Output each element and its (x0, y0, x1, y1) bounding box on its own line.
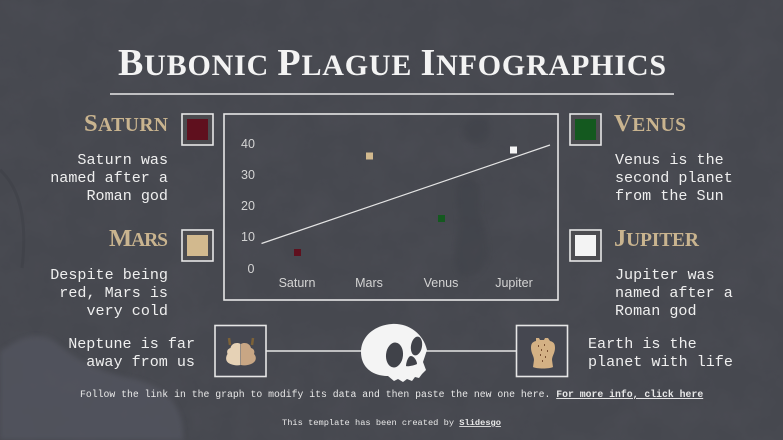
text: Mars description: very cold (86, 302, 168, 320)
panel: Jupiter (570, 225, 733, 320)
text: Saturn description: Roman god (86, 187, 168, 205)
y axis labels: 40 (241, 137, 255, 151)
x axis labels (279, 276, 533, 290)
data points (294, 146, 517, 256)
footer note: Follow the link in the graph to modify its data and then paste the new one here. For more info, click here (80, 389, 703, 400)
y axis labels: 0 (248, 262, 255, 276)
text: Earth: Earth is the (588, 335, 697, 353)
icon: Jupiter swatch (570, 230, 601, 261)
trend line (262, 145, 550, 244)
text: Mars description: Despite being (50, 266, 168, 284)
text: Neptune: away from us (86, 353, 195, 371)
text: Mars description: red, Mars is (59, 284, 168, 302)
heading: Saturn: SATURN (84, 110, 168, 137)
credit line: This template has been created by Slidesgo (282, 418, 501, 428)
text: Jupiter description: Jupiter was (615, 266, 715, 284)
y axis labels: 20 (241, 199, 255, 213)
text: Saturn description: Saturn was (77, 151, 168, 169)
icon: Mars swatch (182, 230, 213, 261)
heading: Mars: MARS (109, 225, 168, 252)
y axis labels (241, 137, 255, 276)
text: Jupiter description: named after a (615, 284, 733, 302)
x axis labels: Jupiter (495, 276, 533, 290)
icon: torso box (516, 326, 568, 376)
icon: skull (361, 324, 427, 382)
text: Saturn description: named after a (50, 169, 168, 187)
text: Venus description: from the Sun (615, 187, 724, 205)
icon: lungs box (215, 326, 266, 376)
x axis labels: Mars (355, 276, 383, 290)
icon: Venus swatch (570, 114, 601, 145)
panel: Saturn (50, 110, 213, 205)
heading: Venus: VENUS (614, 110, 686, 137)
x axis labels: Saturn (279, 276, 315, 290)
text: Venus description: second planet (615, 169, 733, 187)
y axis labels: 10 (241, 230, 255, 244)
panel: Mars (50, 225, 213, 320)
y axis labels: 30 (241, 168, 255, 182)
x axis labels: Venus (424, 276, 458, 290)
panel: Venus (570, 110, 733, 205)
text: Jupiter description: Roman god (615, 302, 697, 320)
connector lines (266, 350, 516, 352)
text: Earth: planet with life (588, 353, 733, 371)
text: Venus description: Venus is the (615, 151, 724, 169)
title: BUBONIC PLAGUE INFOGRAPHICS (118, 42, 666, 84)
heading: Jupiter: JUPITER (614, 225, 700, 252)
icon: Saturn swatch (182, 114, 213, 145)
chart: scatter plot with trend line (224, 114, 558, 300)
text: Neptune: Neptune is far (68, 335, 195, 353)
